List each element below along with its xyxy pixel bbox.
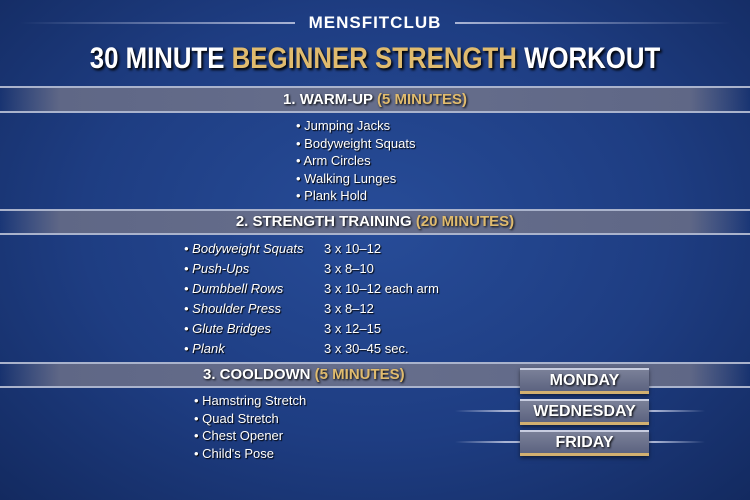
section heading: warm-up bbox=[0, 86, 750, 113]
text: Shoulder Press bbox=[192, 301, 281, 316]
day label: wednesday: WEDNESDAY bbox=[533, 403, 636, 420]
text: 3 x 10–12 bbox=[324, 241, 381, 256]
cooldown list: Quad Stretch bbox=[202, 410, 279, 426]
text: Bodyweight Squats bbox=[192, 241, 303, 256]
text: 3 x 30–45 sec. bbox=[324, 341, 409, 356]
text: 3 x 10–12 each arm bbox=[324, 281, 439, 296]
text: Plank bbox=[192, 341, 225, 356]
section heading: strength training: 2. STRENGTH TRAINING (20 MINUTES) bbox=[236, 213, 514, 230]
section heading: cooldown bbox=[0, 362, 750, 388]
text: Dumbbell Rows bbox=[192, 281, 283, 296]
cooldown list: Chest Opener bbox=[202, 428, 283, 443]
day label: friday bbox=[520, 430, 649, 456]
cooldown list bbox=[194, 393, 307, 460]
warm-up list bbox=[296, 118, 416, 203]
title: 30 MINUTE BEGINNER STRENGTH WORKOUT bbox=[90, 42, 660, 75]
day label: friday: FRIDAY bbox=[555, 434, 614, 451]
day label: monday: MONDAY bbox=[550, 372, 619, 389]
text: 3 x 12–15 bbox=[324, 321, 381, 336]
brand header: MENSFITCLUB bbox=[309, 13, 441, 32]
text: 3 x 8–10 bbox=[324, 261, 374, 276]
section heading: cooldown: 3. COOLDOWN (5 MINUTES) bbox=[203, 366, 405, 383]
text: 3 x 8–12 bbox=[324, 301, 374, 316]
warm-up list: Jumping Jacks bbox=[304, 118, 390, 133]
cooldown list: Hamstring Stretch bbox=[202, 393, 306, 408]
warm-up list: Walking Lunges bbox=[304, 170, 396, 186]
day label: monday bbox=[520, 368, 649, 394]
day label: wednesday bbox=[520, 399, 649, 425]
strength exercise table bbox=[184, 241, 440, 356]
text: Push-Ups bbox=[192, 261, 249, 276]
section heading: strength training bbox=[0, 209, 750, 235]
warm-up list: Plank Hold bbox=[304, 188, 367, 203]
section heading: warm-up: 1. WARM-UP (5 MINUTES) bbox=[283, 91, 467, 108]
cooldown list: Child's Pose bbox=[202, 446, 274, 460]
warm-up list: Bodyweight Squats bbox=[304, 136, 415, 150]
text: Glute Bridges bbox=[192, 321, 271, 336]
warm-up list: Arm Circles bbox=[303, 153, 371, 168]
